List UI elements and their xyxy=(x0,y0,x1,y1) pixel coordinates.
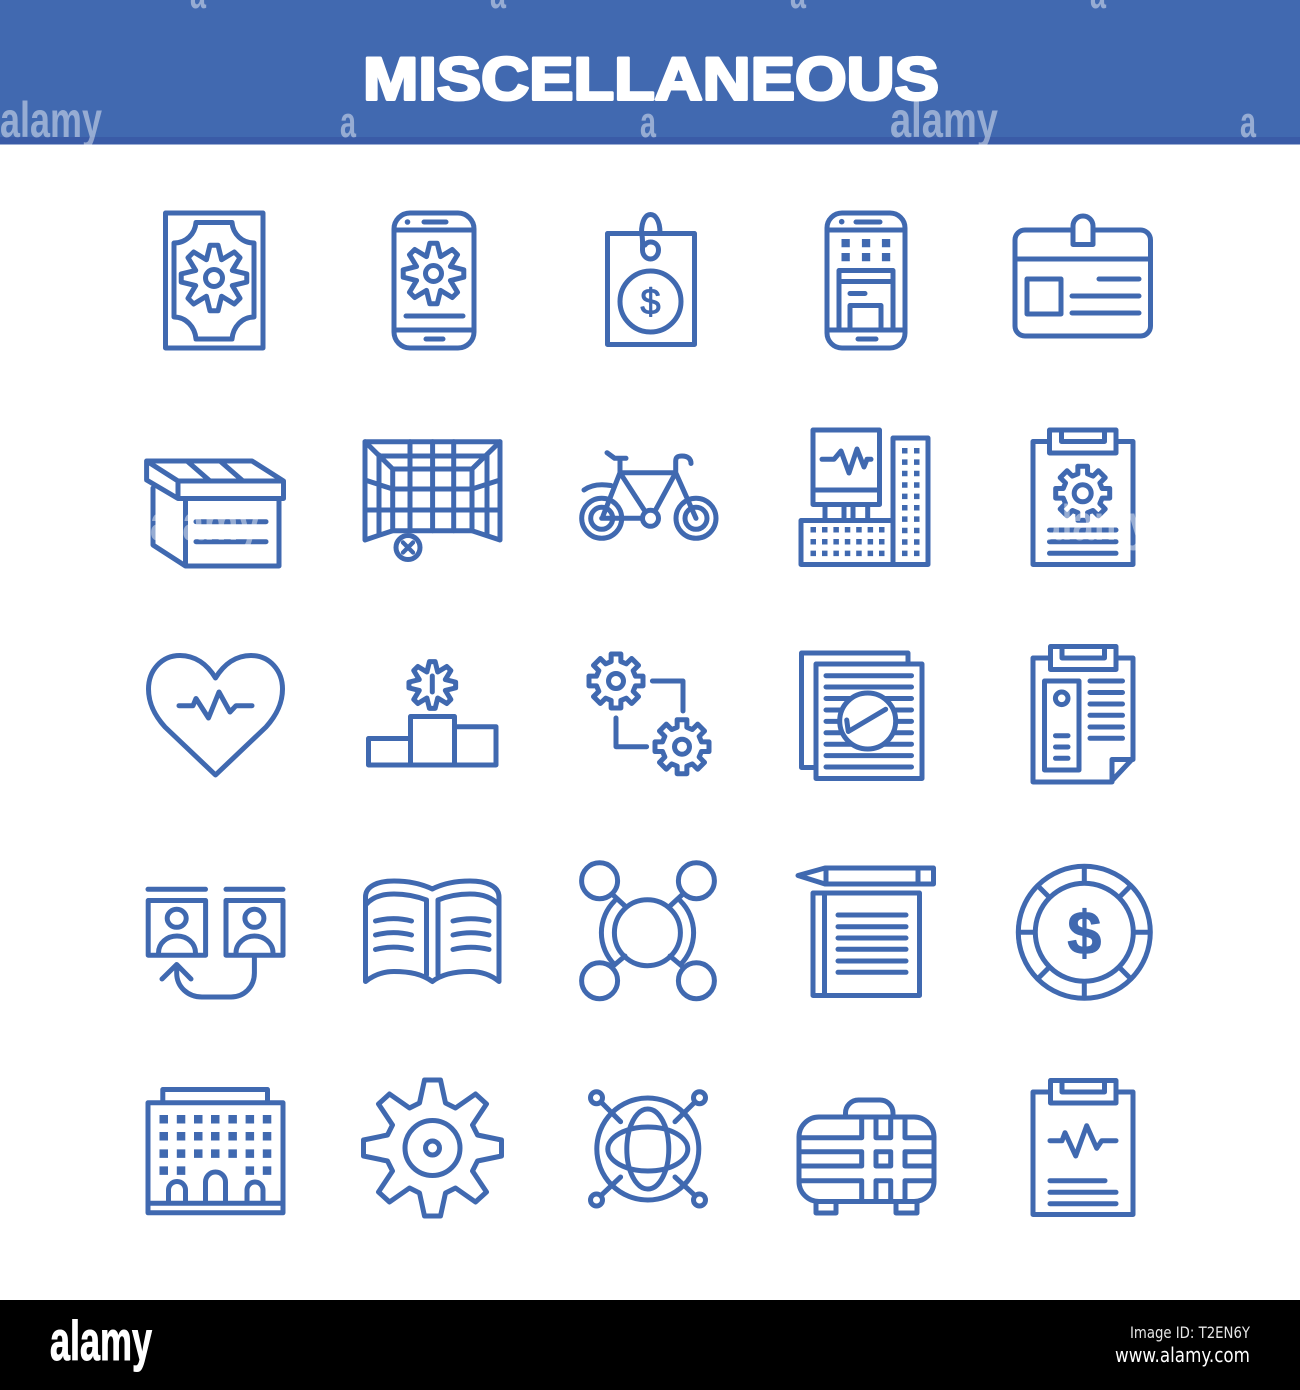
dollar sign: $ xyxy=(1067,899,1101,967)
icon: monitor and tower computer xyxy=(801,430,928,564)
icon: winner podium xyxy=(368,662,496,765)
icon: price tag with dollar xyxy=(608,214,694,344)
watermarks: a xyxy=(640,98,656,147)
icon: swap profiles with arrow xyxy=(148,889,283,997)
icon: football goal net xyxy=(365,442,500,560)
watermarks: alamy xyxy=(0,92,102,148)
icon: checked documents xyxy=(802,653,922,778)
icon: office building xyxy=(148,1090,283,1213)
watermarks xyxy=(0,0,1256,551)
icon: phone with building xyxy=(827,213,905,348)
watermarks: alamy xyxy=(1040,495,1150,551)
icon: notepad with pencil xyxy=(798,868,934,996)
watermarks: alamy xyxy=(890,92,998,148)
icon: heart with pulse xyxy=(148,656,282,775)
icon: bicycle xyxy=(582,453,716,538)
icon: workflow gears xyxy=(589,654,709,774)
icon: certificate with gear xyxy=(166,213,263,348)
icon: open book xyxy=(366,881,499,982)
icon: network nodes xyxy=(582,863,714,999)
header banner xyxy=(0,0,1300,144)
icon: id badge xyxy=(1015,216,1150,336)
icon: clipboard report with page fold xyxy=(1033,646,1133,782)
icon: suitcase xyxy=(799,1100,934,1213)
title: MISCELLANEOUS xyxy=(363,46,939,112)
icon: globe with nodes xyxy=(590,1092,706,1206)
footer bar xyxy=(0,1300,1300,1390)
footer logo: alamy xyxy=(50,1309,152,1372)
website: www.alamy.com xyxy=(1115,1343,1250,1367)
image id: Image ID: T2EN6Y xyxy=(1130,1323,1250,1342)
icon grid xyxy=(147,213,1151,1216)
icon: clipboard with gear xyxy=(1033,430,1133,564)
watermarks: alamy xyxy=(150,495,260,551)
watermarks: a xyxy=(340,98,356,147)
icon: large gear xyxy=(364,1080,502,1216)
icon: dollar coin xyxy=(1018,866,1150,998)
icon: phone with gear xyxy=(394,213,474,348)
watermarks: a xyxy=(1240,98,1256,147)
icon: cardboard box xyxy=(147,461,284,566)
icon: medical clipboard xyxy=(1033,1080,1133,1214)
dollar sign: $ xyxy=(640,281,661,322)
